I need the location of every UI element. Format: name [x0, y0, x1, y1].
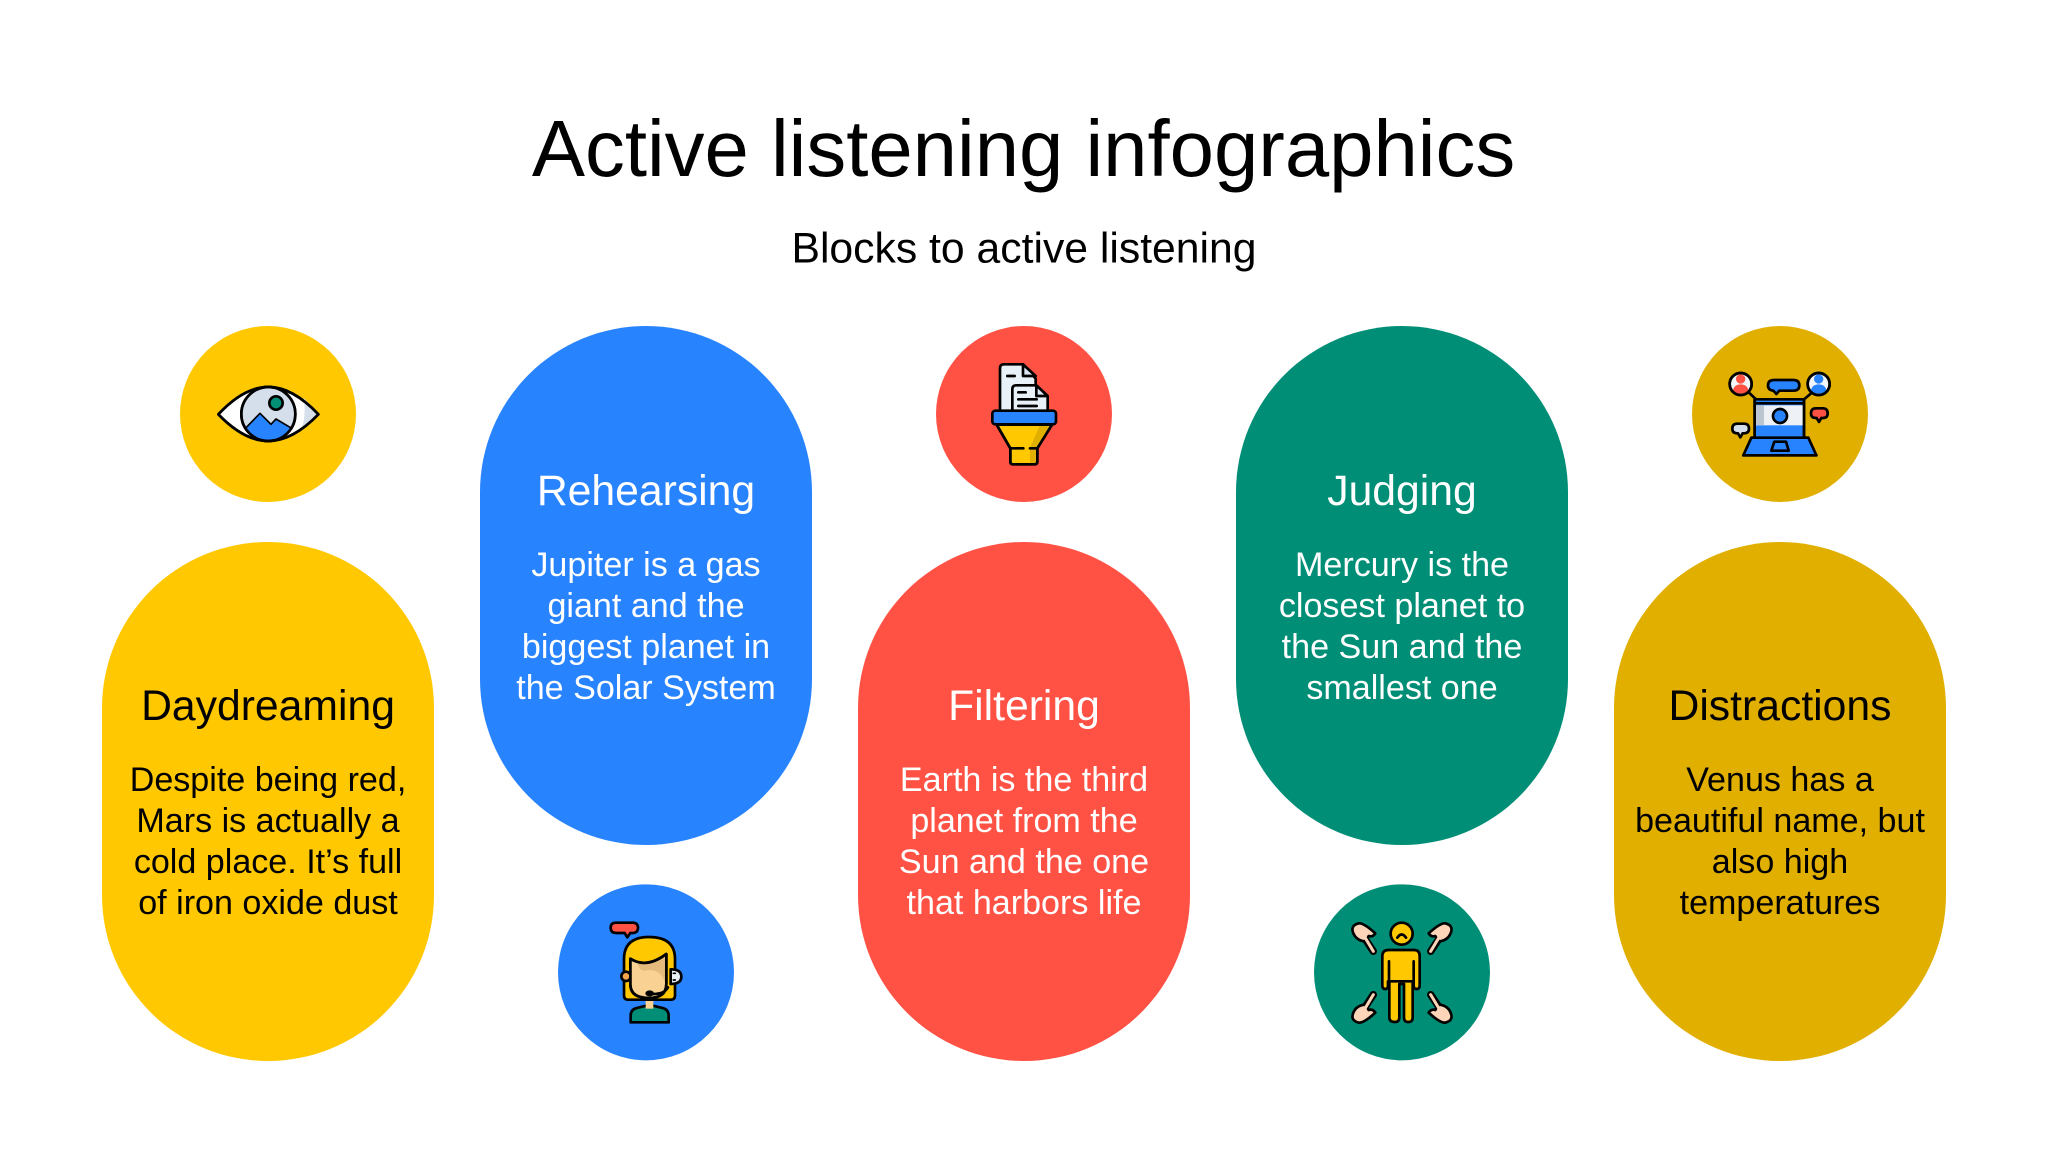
- text block: Distractions description: Venus has a: [1686, 761, 1874, 799]
- heading: Rehearsing: Rehearsing: [537, 467, 755, 515]
- panel: Rehearsing: [480, 326, 812, 845]
- text block: Filtering description: planet from the: [910, 802, 1138, 840]
- text block: Rehearsing description: biggest planet in: [522, 628, 770, 666]
- text block: Distractions description: temperatures: [1680, 884, 1880, 922]
- heading: Distractions: Distractions: [1669, 682, 1891, 730]
- text block: Rehearsing description: Jupiter is a gas: [531, 546, 761, 584]
- text block: Filtering description: Earth is the third: [900, 761, 1148, 799]
- heading: Filtering: Filtering: [948, 682, 1100, 730]
- panel: Distractions: [1614, 542, 1946, 1061]
- heading: Daydreaming: Daydreaming: [141, 682, 395, 730]
- text block: Filtering description: that harbors life: [907, 884, 1141, 922]
- panel: Filtering: [858, 542, 1190, 1061]
- text block: Rehearsing description: the Solar System: [516, 669, 776, 707]
- text block: Daydreaming description: of iron oxide dust: [138, 884, 398, 922]
- panel: Daydreaming: [102, 542, 434, 1061]
- title: Active listening infographics: [532, 104, 1515, 193]
- icon: person being pointed at: [1314, 884, 1490, 1060]
- icon: paper filter funnel: [936, 326, 1112, 502]
- panel: Judging: [1236, 326, 1568, 845]
- text block: Distractions description: also high: [1712, 843, 1848, 881]
- text block: Daydreaming description: Mars is actually a: [136, 802, 400, 840]
- icon: woman with headset: [558, 884, 734, 1060]
- heading: Judging: Judging: [1327, 467, 1477, 515]
- text block: Judging description: smallest one: [1306, 669, 1498, 707]
- text block: Daydreaming description: cold place. It’s full: [134, 843, 402, 881]
- text block: Filtering description: Sun and the one: [899, 843, 1149, 881]
- text block: Judging description: Mercury is the: [1295, 546, 1509, 584]
- text block: Rehearsing description: giant and the: [547, 587, 745, 625]
- text block: Distractions description: beautiful name, but: [1635, 802, 1925, 840]
- text block: Judging description: the Sun and the: [1282, 628, 1522, 666]
- text block: Judging description: closest planet to: [1279, 587, 1525, 625]
- subtitle: Blocks to active listening: [791, 224, 1257, 272]
- icon: laptop with people and speech bubbles: [1692, 326, 1868, 502]
- icon: eye with mountain picture: [180, 326, 356, 502]
- text block: Daydreaming description: Despite being red,: [130, 761, 406, 799]
